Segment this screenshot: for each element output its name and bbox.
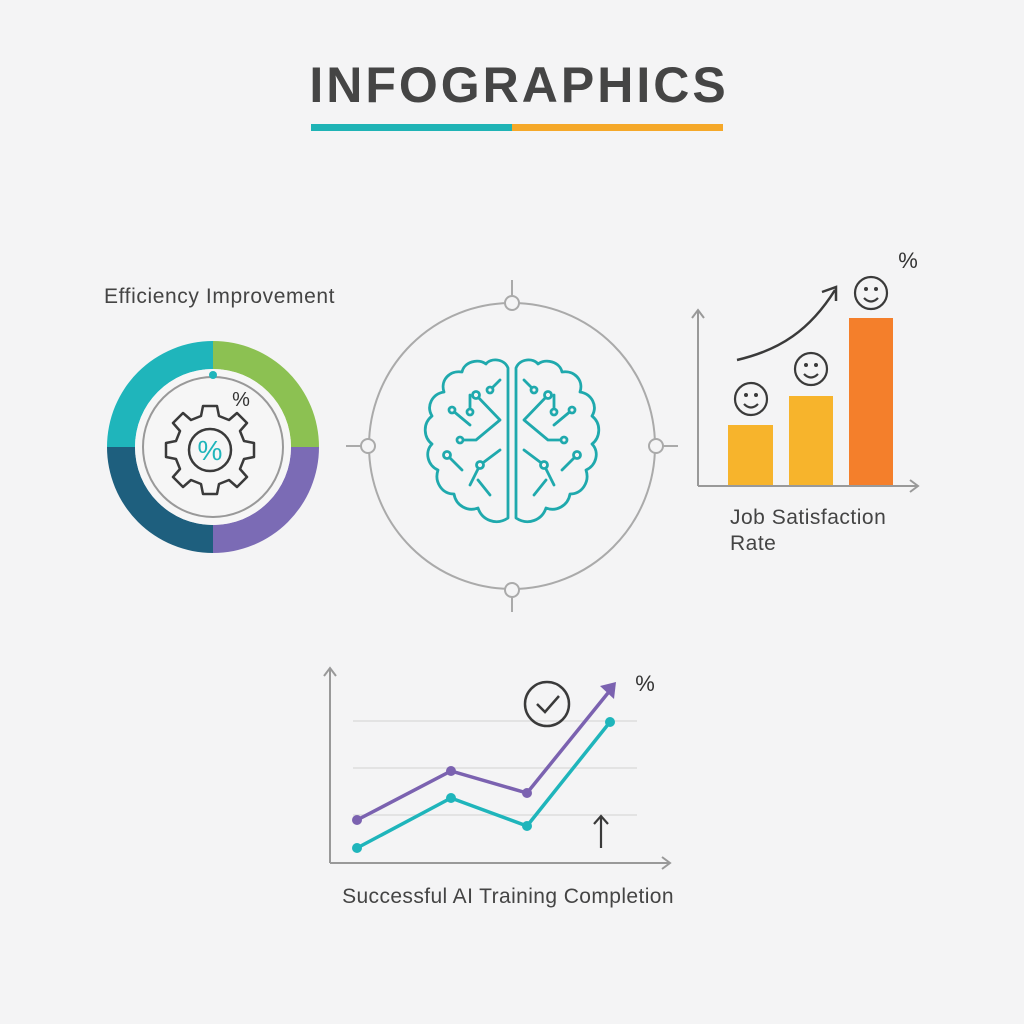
bar chart: job satisfaction: % bbox=[898, 248, 918, 273]
arrow: rising curve bbox=[737, 287, 836, 360]
icon: circuit brain bbox=[425, 360, 599, 522]
icons: smileys bbox=[735, 277, 887, 415]
bar chart: job satisfaction bbox=[692, 248, 918, 492]
donut chart: efficiency: % bbox=[232, 389, 250, 411]
icon: check circle bbox=[525, 682, 569, 726]
brain hub circle bbox=[346, 280, 678, 612]
line chart: AI training completion bbox=[324, 668, 670, 869]
label: efficiency improvement: Efficiency Improvement bbox=[104, 285, 335, 308]
label: successful AI training completion: Successful AI Training Completion bbox=[342, 885, 674, 908]
title: INFOGRAPHICS bbox=[309, 57, 729, 113]
label: job satisfaction rate: Job Satisfaction bbox=[730, 506, 886, 529]
icon: gear with percent bbox=[166, 406, 254, 494]
line chart: AI training completion: % bbox=[635, 671, 655, 696]
donut chart: efficiency bbox=[107, 341, 319, 553]
icon: up arrow bbox=[594, 816, 608, 848]
label: job satisfaction rate: Rate bbox=[730, 532, 776, 555]
icon: gear with percent: % bbox=[198, 435, 222, 466]
